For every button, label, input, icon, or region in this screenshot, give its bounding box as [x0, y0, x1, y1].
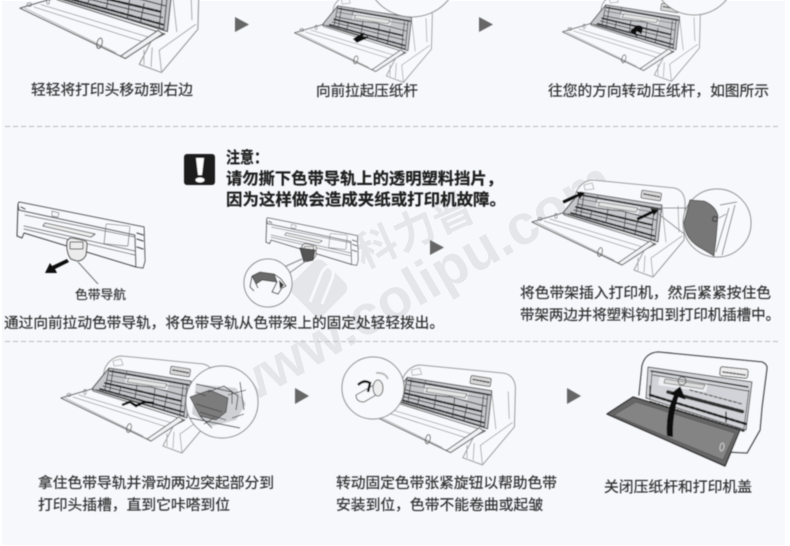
warning note [184, 148, 506, 209]
printer illustration 7 [607, 352, 767, 466]
caption 5: 将色带架插入打印机，然后紧紧按住色 [520, 285, 771, 302]
ribbon cartridge small with detail [244, 218, 358, 307]
arrow 4 [295, 388, 309, 404]
step 6: seat ribbon guide [38, 356, 274, 514]
caption 4: 通过向前拉动色带导轨，将色带导轨从色带架上的固定处轻轻拨出。 [4, 315, 444, 332]
step 5: insert ribbon cartridge: 带架两边并将塑料钩扣到打印机插槽中。 [520, 307, 780, 324]
caption 6: 拿住色带导轨并滑动两边突起部分到 [38, 474, 274, 492]
ribbon cartridge [17, 202, 145, 268]
step 1: move print head [20, 0, 199, 99]
arrow 1 [235, 17, 249, 32]
printer illustration 3 [563, 0, 736, 81]
caption 1: 轻轻将打印头移动到右边 [31, 82, 194, 99]
warning text: 注意： [226, 148, 268, 167]
watermark logo [287, 256, 351, 320]
printer illustration 2 [295, 0, 459, 82]
watermark text: 科力普 [348, 183, 482, 277]
arrow: pull guide [45, 259, 69, 273]
caption 8: 关闭压纸杆和打印机盖 [604, 479, 752, 496]
printer illustration 6 [342, 357, 515, 465]
printer illustration 1 [20, 0, 199, 72]
warning text: 请勿撕下色带导轨上的透明塑料挡片， [226, 169, 503, 188]
caption 7: 转动固定色带张紧旋钮以帮助色带 [336, 475, 557, 492]
step 7: turn ribbon knob: 安装到位，色带不能卷曲或起皱 [336, 497, 544, 514]
arrow 3 [430, 240, 444, 255]
caption 2: 向前拉起压纸杆 [316, 83, 418, 100]
warning text [226, 148, 506, 209]
step 3: rotate paper lever [548, 0, 769, 100]
step 4: ribbon guide removal [4, 202, 444, 332]
step 6: seat ribbon guide: 打印头插槽，直到它咔嗒到位 [38, 496, 230, 514]
arrow 5 [567, 388, 581, 404]
watermark [210, 148, 623, 423]
warning text: 因为这样做会造成夹纸或打印机故障。 [226, 190, 506, 209]
caption 3: 往您的方向转动压纸杆，如图所示 [548, 83, 769, 100]
arrow 2 [479, 17, 493, 32]
watermark text: www.colipu.com [210, 148, 623, 423]
step 5: insert ribbon cartridge [520, 180, 780, 324]
printer illustration 4 [532, 180, 751, 277]
ribbon guide label: 色带导航 [75, 287, 126, 302]
pointer line [78, 262, 98, 284]
printer illustration 5 [61, 356, 258, 453]
step 2: pull paper lever [295, 0, 459, 100]
step 8: close lever and cover [604, 352, 767, 496]
step 7: turn ribbon knob [336, 357, 557, 514]
icon: exclamation [184, 154, 215, 185]
